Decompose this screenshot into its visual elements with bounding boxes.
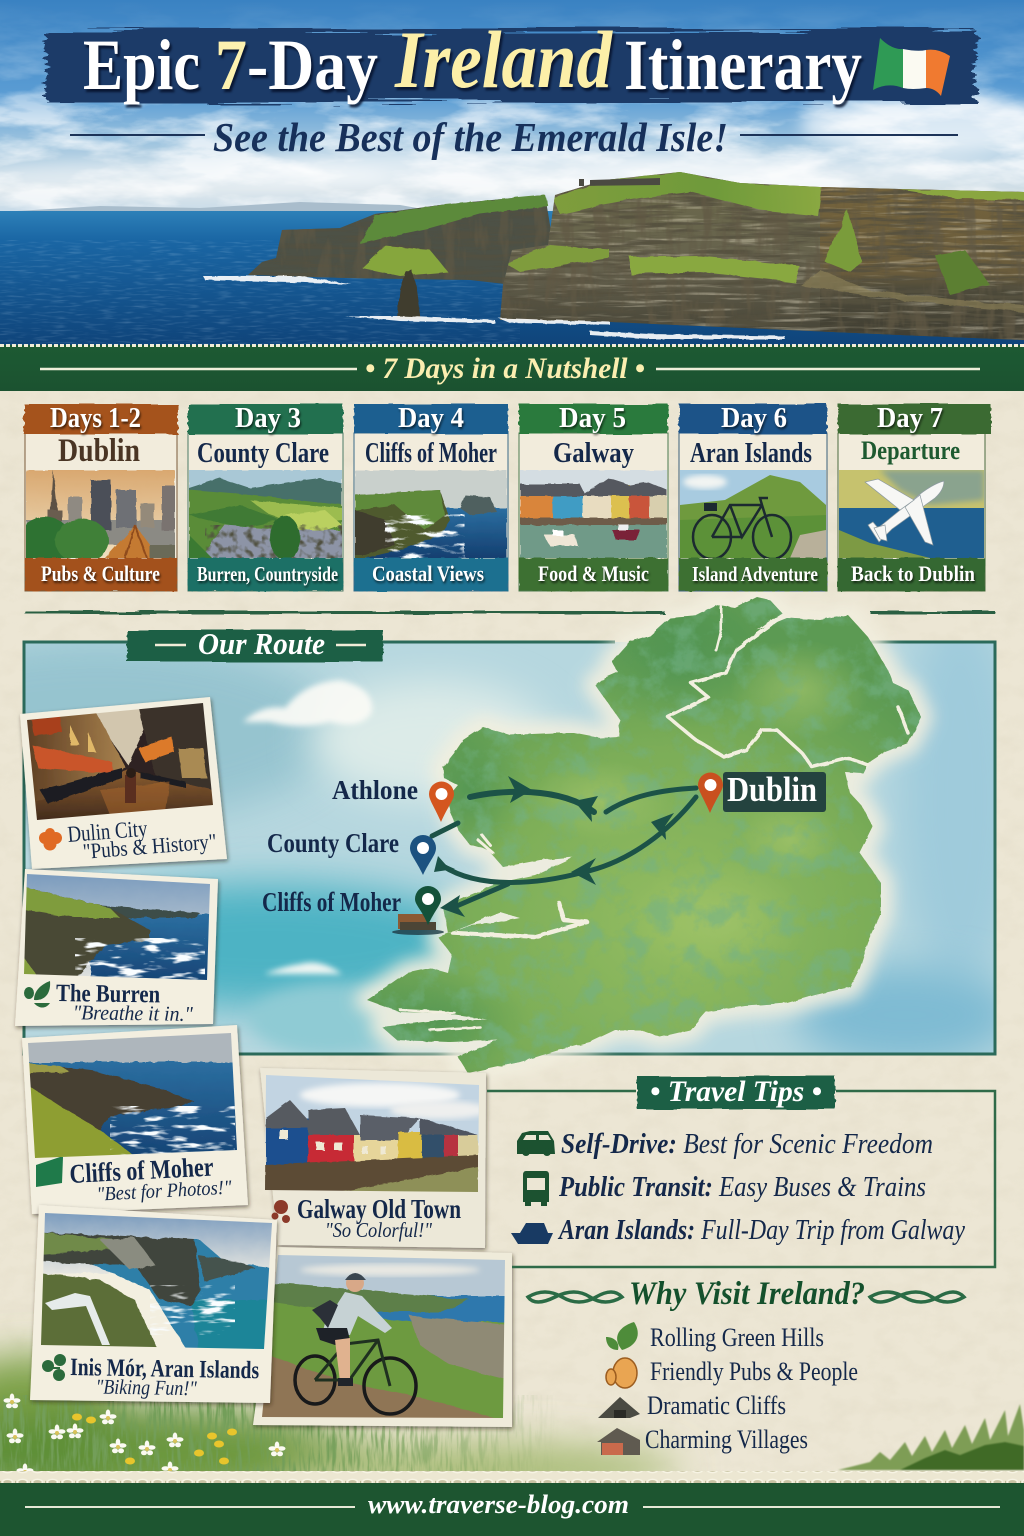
caption: "So Colorful!" [325,1218,432,1242]
caption [70,1354,260,1401]
fern tufts [838,1404,1024,1470]
icon: beer mug [606,1358,637,1388]
heading: Why Visit Ireland? [629,1276,865,1312]
arrowheads [434,776,674,917]
card: Day 3 County Clare: Burren, Countryside [197,562,338,586]
scene: airplane over coast [839,470,984,558]
day cards [17,403,991,591]
title text: Epic [83,25,200,105]
title text: Ireland [394,14,613,105]
caption [297,1194,461,1242]
far castle tower [576,178,660,186]
sea waves [0,240,520,345]
card: Day 3 County Clare: Day 3 [235,403,301,434]
card: Day 7 Departure: Departure [861,436,960,465]
scene: green hills and limestone [189,470,342,560]
caption [56,980,193,1026]
card: Day 6 Aran Islands: Island Adventure [692,562,818,586]
photo card: Inis Mor, Aran Islands [30,1205,278,1403]
meadow wash [0,1355,680,1503]
card: Day 4 Cliffs of Moher: Day 4 [398,403,464,434]
surf [203,276,785,339]
pin: Athlone [429,782,454,822]
map sea [26,642,994,1052]
icon: Irish flag [873,38,950,96]
caption: "Biking Fun!" [96,1374,197,1400]
photo: cliffs with waves [28,1033,237,1158]
sky [0,0,1024,215]
card: Day 3 County Clare: County Clare [197,437,329,469]
caption [69,1151,233,1207]
caption: "Best for Photos!" [96,1177,233,1206]
icon: orange shamrock [39,828,62,850]
title text: 7 [215,25,247,105]
main cliff [495,170,1024,345]
caption: The Burren [56,980,160,1008]
icon: car [517,1131,555,1156]
text: Charming Villages: Charming Villages [645,1425,808,1454]
far cliff [248,194,550,284]
caption: "Pubs & History" [82,828,217,864]
photo: cliffs and waterfall [38,1208,278,1355]
coast halo [367,597,921,1073]
icon: bus [523,1171,549,1206]
icon: village house [597,1428,640,1455]
county border and inlets [400,607,908,1030]
panel: Travel Tips [487,1075,995,1267]
map of Ireland [350,590,930,1080]
icon: red bloom [272,1200,290,1223]
website: www.traverse-blog.com [368,1490,629,1519]
route arrows [432,776,696,917]
text: Friendly Pubs & People: Friendly Pubs & People [650,1357,858,1386]
clouds on map [243,680,372,974]
far hills [18,202,418,211]
daisies [4,1394,286,1478]
scene: coastal cliffs [355,470,507,558]
photo: coastal cliff [24,874,210,980]
heading: Our Route [127,626,383,662]
caption [67,810,217,865]
card: Day 5 Galway: Day 5 [559,403,626,434]
text: Dramatic Cliffs: Dramatic Cliffs [647,1391,786,1420]
photo card: The Burren [15,865,220,1026]
heading text: • Travel Tips • [650,1075,822,1108]
scene: Galway harbour houses [520,470,667,558]
card: Day 5 Galway [519,403,668,591]
card: Day 5 Galway: Galway [553,437,634,469]
card: Day 7 Departure: Back to Dublin [851,561,975,586]
icon: leaf [606,1322,638,1350]
label: Cliffs of Moher: Cliffs of Moher [262,887,401,917]
header photo: Cliffs of Moher landscape [0,0,1024,345]
card: Day 6 Aran Islands: Day 6 [721,403,787,434]
section band: 7 Days in a Nutshell [0,345,1024,391]
section title: • 7 Days in a Nutshell • [365,352,645,385]
icon: boat [511,1223,553,1244]
footer band [0,1483,1024,1536]
card: Days 1-2 Dublin [17,403,178,591]
card: Days 1-2 Dublin: Dublin [58,433,140,469]
sea stack [397,270,421,319]
label: Athlone: Athlone [332,775,418,805]
subtitle: See the Best of the Emerald Isle! [213,114,728,160]
icon: shamrock sprig [42,1354,66,1381]
icon: cliff hut [598,1397,640,1418]
clouds [0,0,1024,215]
photo: cyclist [255,1250,510,1422]
lace trim [0,1471,1024,1483]
pin: Dublin [698,772,723,813]
card: Day 4 Cliffs of Moher: Coastal Views [372,561,484,586]
text: Rolling Green Hills: Rolling Green Hills [650,1323,824,1352]
label: County Clare: County Clare [267,828,399,858]
title text [83,14,862,105]
title banner [46,14,976,105]
card: Day 5 Galway: Food & Music [538,561,649,586]
tip: Aran Islands: Aran Islands: Full-Day Trip from Galway [557,1215,965,1246]
scene: Dublin skyline [26,470,175,558]
celtic knot ornaments [528,1292,964,1302]
footer [0,1471,1024,1536]
title text: Itinerary [624,25,862,105]
card: Day 6 Aran Islands: Aran Islands [690,437,812,469]
tour boat [392,914,444,935]
scene: bicycle on island hill [680,470,826,559]
title text: -Day [247,25,378,105]
photo: Dublin street at dusk [27,703,213,820]
pin: County Clare [410,835,436,875]
caption: Dulin City [67,816,149,847]
caption: "Breathe it in." [73,1000,193,1026]
card: Day 7 Departure: Day 7 [877,403,943,434]
label: Dublin: Dublin [727,770,817,809]
grass and wildflowers [0,1355,1024,1503]
tip: Public Transit: Public Transit: Easy Buses & Trains [558,1172,926,1203]
icon: green cliff badge [36,1157,63,1187]
heading banner [637,1076,835,1109]
sea [0,211,1024,345]
caption: Galway Old Town [297,1194,461,1224]
photo card: Galway Old Town [260,1068,490,1248]
card: Days 1-2 Dublin: Pubs & Culture [41,561,160,586]
card: Day 6 Aran Islands [679,403,827,591]
card: Day 3 County Clare [188,403,343,591]
card: Day 7 Departure [838,403,991,591]
panel: route map [0,590,1020,1080]
photo: colourful harbour [264,1073,490,1195]
heading: Our Route: Our Route [198,626,325,661]
icon: green leaf [24,981,50,1008]
caption: Inis Mór, Aran Islands [70,1354,260,1384]
grass blades [0,1395,560,1473]
caption: Cliffs of Moher [69,1151,214,1189]
photo card: biking the coast [253,1247,512,1427]
card: Day 4 Cliffs of Moher [354,403,508,591]
icon: airplane [865,479,944,545]
photo card: Dublin City [15,695,227,869]
brush stroke background [46,30,976,102]
tip: Self-Drive: Self-Drive: Best for Scenic Freedom [561,1129,933,1160]
pin: Cliffs of Moher [415,886,441,925]
card: Day 4 Cliffs of Moher: Cliffs of Moher [365,437,497,469]
card: Days 1-2 Dublin: Days 1-2 [50,403,141,434]
panel: Why Visit Ireland [528,1276,964,1455]
photo card: Cliffs of Moher [20,1025,248,1214]
